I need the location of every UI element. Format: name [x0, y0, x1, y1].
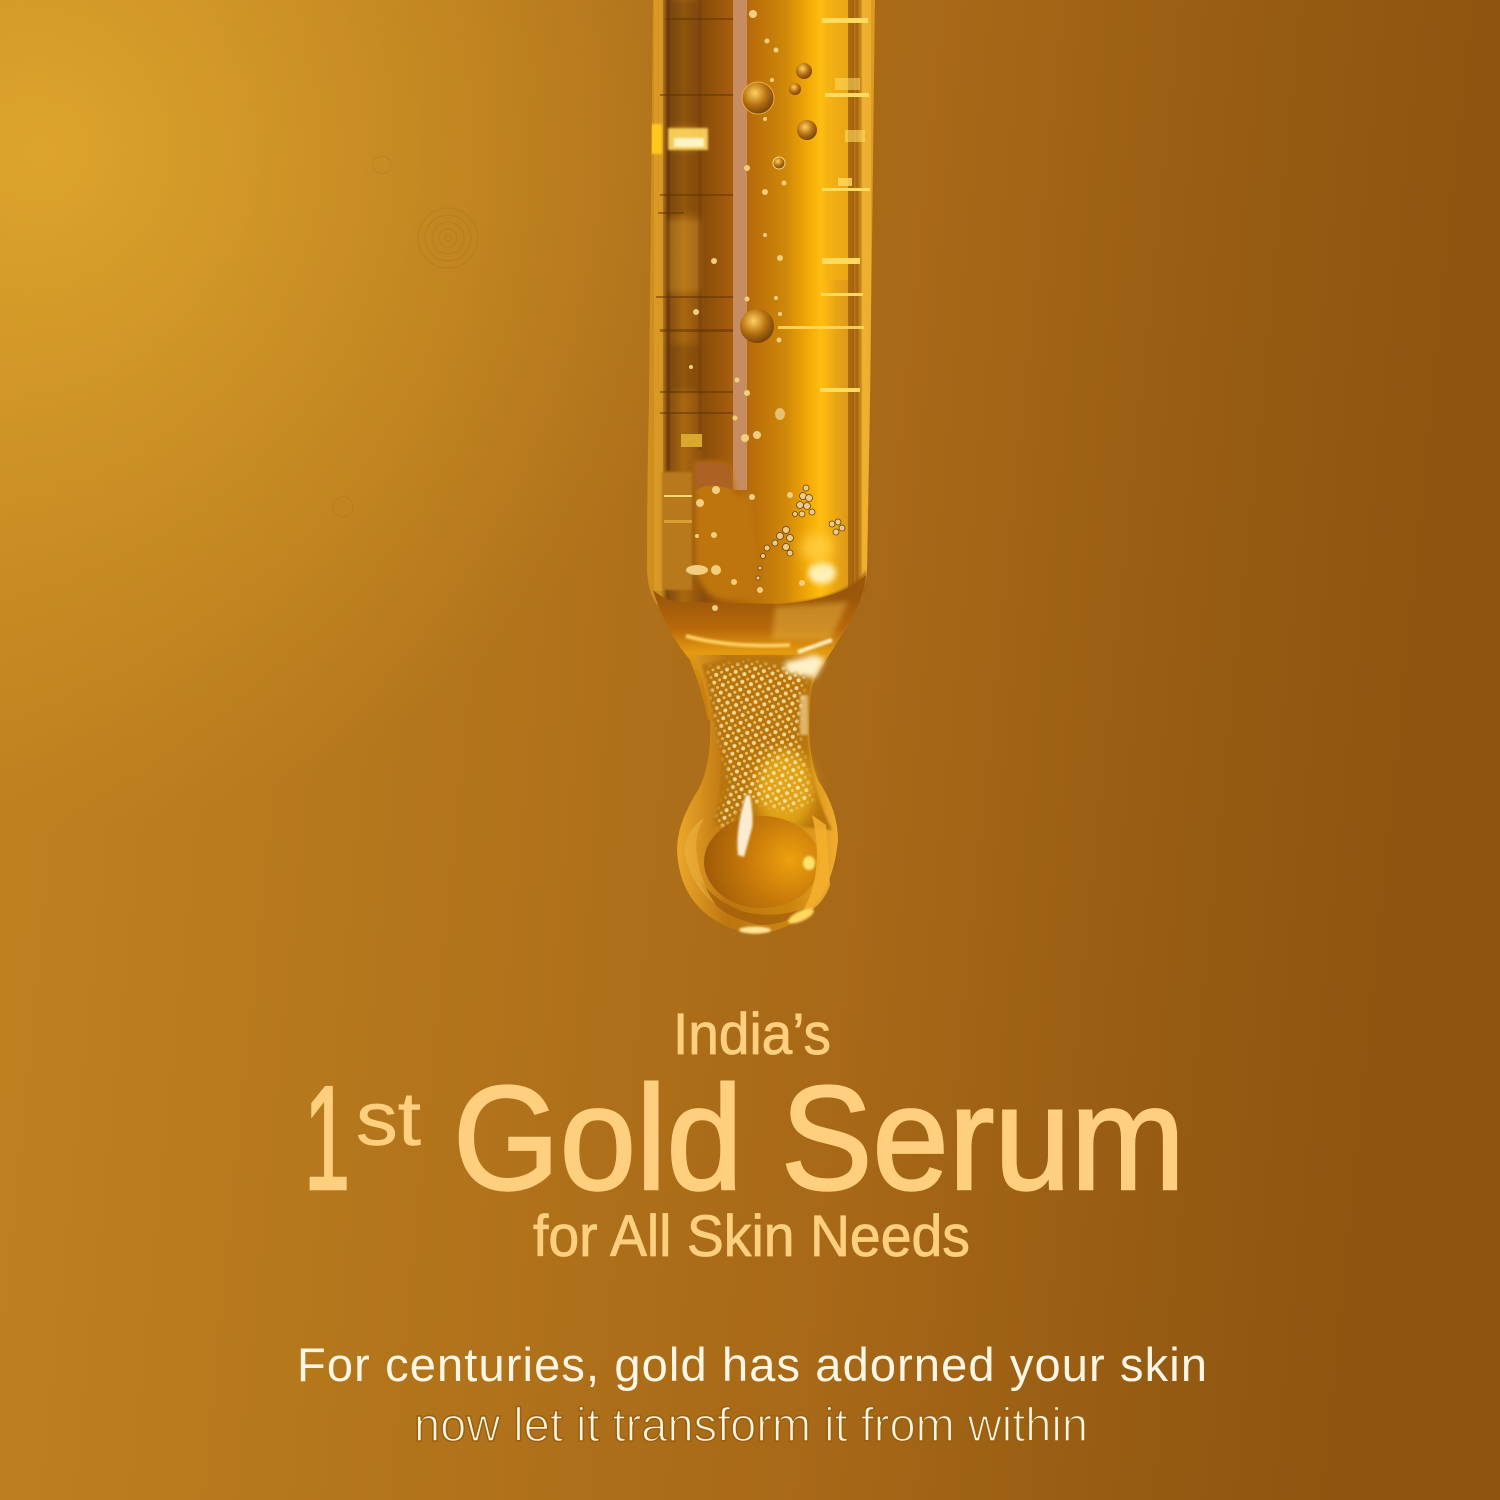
tube measurement lines and reflections	[651, 0, 871, 600]
faint ripple mark on background	[333, 156, 478, 517]
inner sphere of the drop	[704, 816, 820, 908]
heading: India's: India’s	[673, 1002, 831, 1067]
tagline	[297, 1338, 1207, 1451]
superscript: st: st	[356, 1077, 421, 1162]
bright glints at neck	[785, 655, 825, 678]
tagline line 1: For centuries, gold has adorned your skin	[297, 1338, 1207, 1391]
glass tube	[647, 0, 875, 660]
gold particle mass in neck	[706, 658, 815, 830]
bubble clusters	[756, 485, 845, 580]
headline: India's 1st Gold Serum for All Skin Needs	[304, 1002, 1185, 1269]
hanging serum drop	[677, 640, 838, 935]
dropper with serum drop	[647, 0, 875, 935]
heading: for All Skin Needs: for All Skin Needs	[533, 1204, 970, 1269]
white highlight inside drop	[737, 795, 753, 857]
tagline line 2: now let it transform it from within	[414, 1398, 1088, 1451]
air bubbles in tube	[686, 10, 845, 611]
heading: 1st: 1	[304, 1056, 350, 1221]
tube shoulder narrowing to neck	[653, 575, 866, 720]
heading: Gold Serum: Gold Serum	[453, 1056, 1185, 1221]
lower tube reflection and liquid meniscus	[660, 462, 866, 610]
